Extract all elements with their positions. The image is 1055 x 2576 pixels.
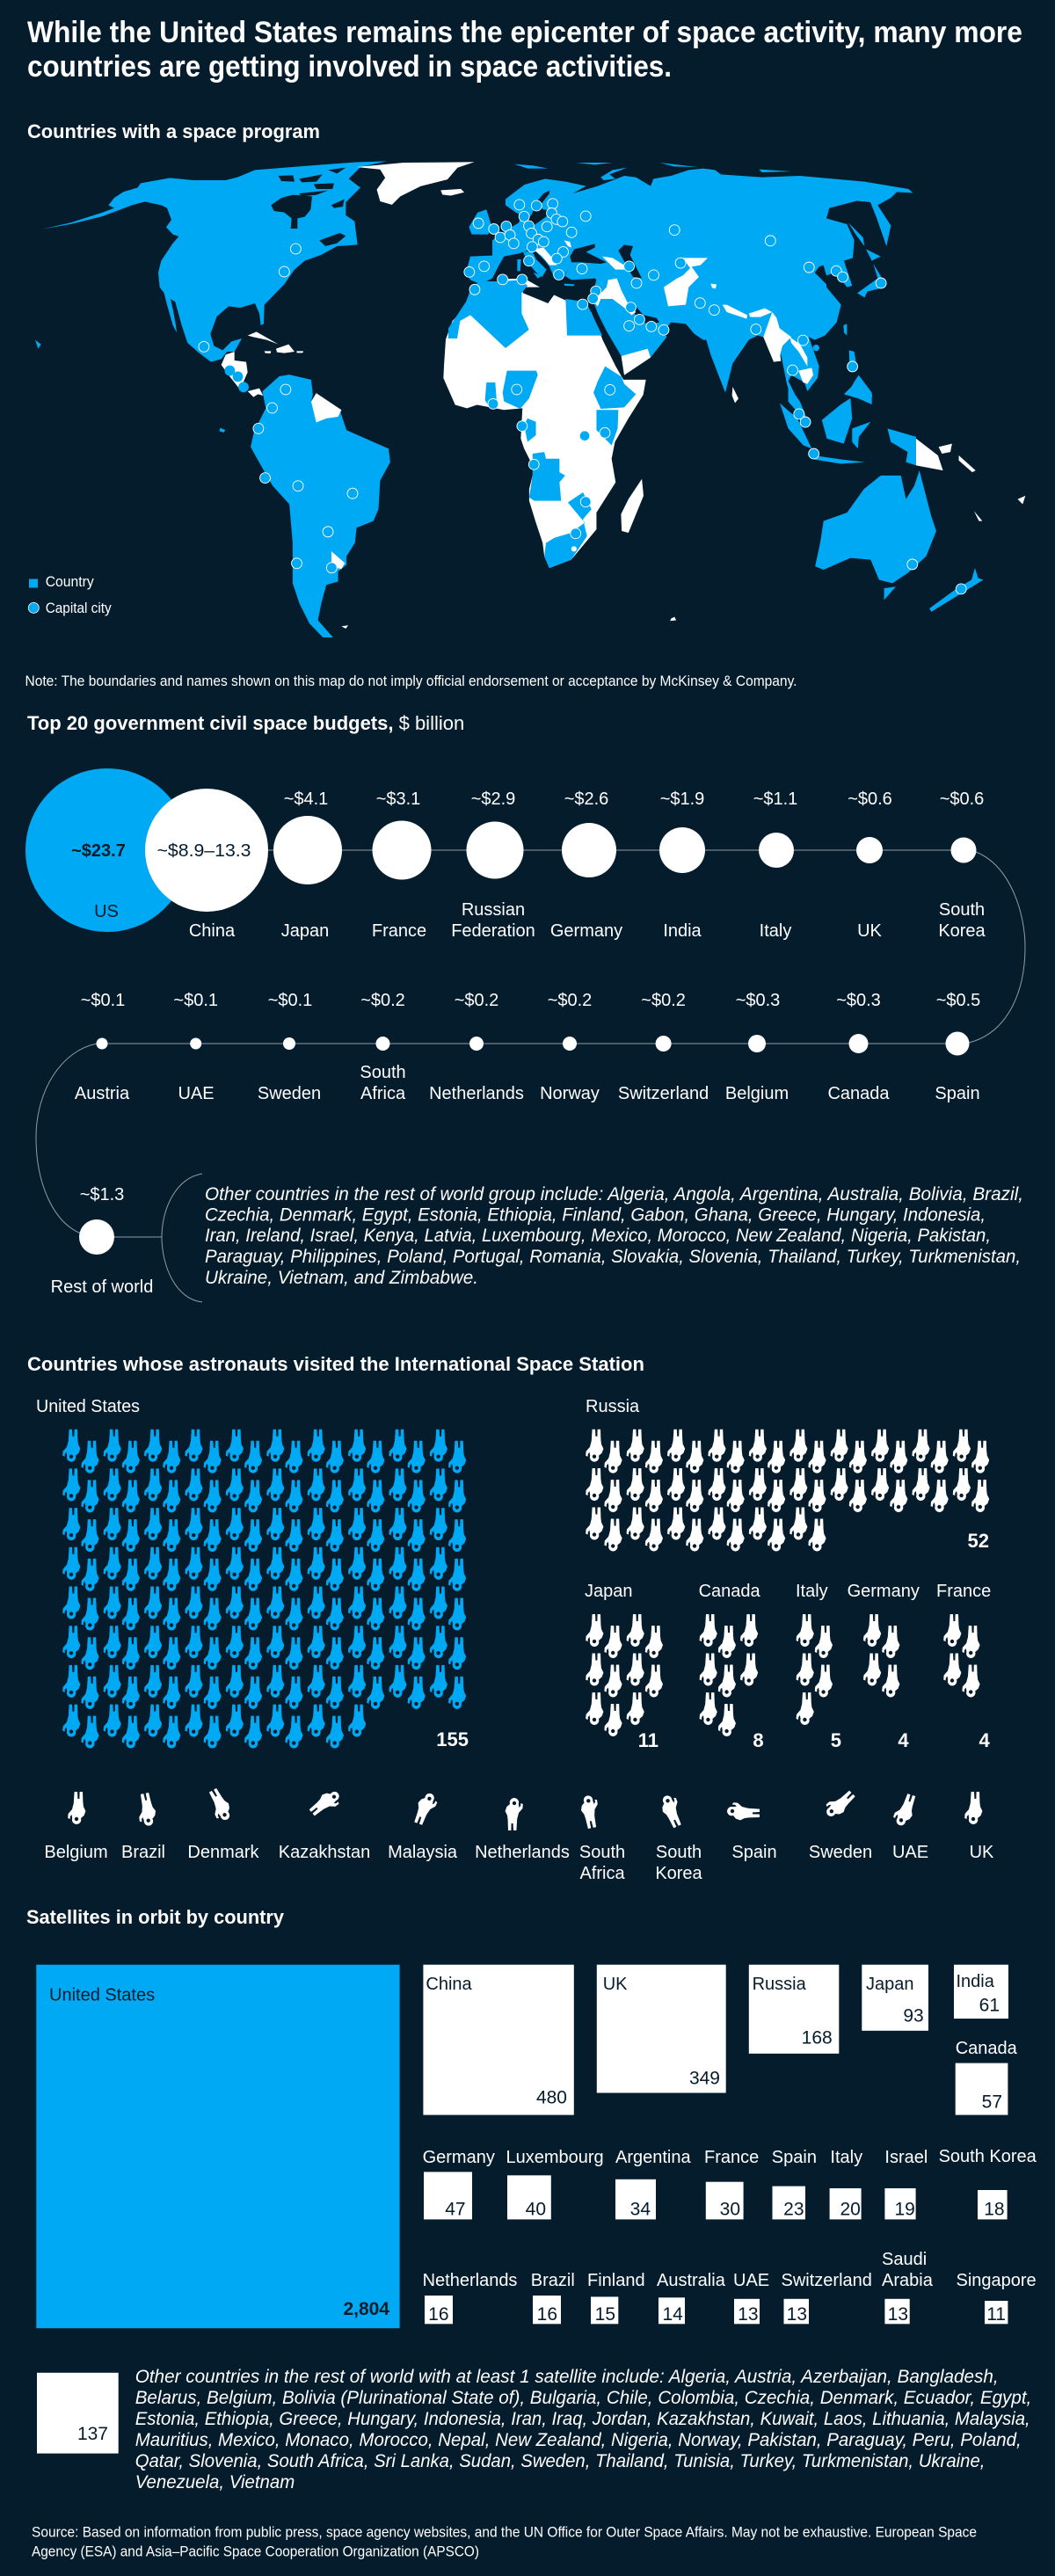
budget: China xyxy=(145,789,268,941)
satellites: Australia: Australia xyxy=(657,2271,726,2290)
satellites: Luxembourg: 40 xyxy=(526,2200,546,2219)
satellites: Germany xyxy=(423,2148,495,2219)
satellites: China xyxy=(423,1965,574,2115)
budget: France: France xyxy=(372,921,426,941)
satellites: Spain: Spain xyxy=(772,2148,817,2167)
budget: South Korea: ~$0.6 xyxy=(940,790,984,809)
budget: UAE: UAE xyxy=(178,1084,215,1103)
satellites: UAE: 13 xyxy=(738,2304,758,2325)
satellites: Netherlands: 16 xyxy=(428,2304,448,2325)
budget: Russian Federation: ~$2.9 xyxy=(471,790,515,809)
budget: France: ~$3.1 xyxy=(376,790,420,809)
satellites: Luxembourg: Luxembourg xyxy=(506,2148,604,2167)
budget: other countries note: Ukraine, Vietnam, and Zimbabwe. xyxy=(205,1268,478,1288)
astronauts: Japan: 11 xyxy=(638,1729,658,1751)
budget: Canada: Canada xyxy=(827,1084,890,1103)
heading: astronauts: Countries whose astronauts visited the International Space Station xyxy=(27,1353,644,1375)
budget: South Korea: Korea xyxy=(938,921,986,941)
heading: budgets: Top 20 government civil space budgets, $ billion xyxy=(27,712,464,734)
budget: Norway xyxy=(540,991,600,1103)
astronauts: Germany: 4 xyxy=(898,1729,909,1751)
budget: Belgium xyxy=(725,991,789,1103)
satellites: China: China xyxy=(426,1975,473,1994)
satellites: Switzerland: 13 xyxy=(787,2304,807,2325)
astronaut: Netherlands xyxy=(475,1798,570,1862)
budget: Canada: ~$0.3 xyxy=(836,991,881,1010)
satellites: Brazil xyxy=(531,2271,575,2325)
budget: Germany: Germany xyxy=(550,921,622,941)
title xyxy=(27,16,1022,84)
satellites: Canada: Canada xyxy=(956,2039,1018,2058)
astronauts: Canada: 8 xyxy=(753,1729,764,1751)
satellites: rest of world: 137 xyxy=(77,2424,108,2444)
astronaut: Denmark xyxy=(187,1786,260,1862)
satellites: Germany: Germany xyxy=(423,2148,495,2167)
satellites: Netherlands xyxy=(423,2271,517,2325)
budget: Sweden xyxy=(258,991,321,1103)
budget: Rest of world: ~$1.3 xyxy=(80,1185,124,1204)
budget: other countries note: Other countries in the rest of world group include: Algeria, Angola, Argentina, Australia, Bolivia, Brazil, xyxy=(205,1184,1023,1204)
astronaut: UK xyxy=(964,1792,994,1862)
astronauts: Canada: Canada xyxy=(699,1582,761,1601)
budget: Italy: Italy xyxy=(760,921,791,941)
astronaut: South Korea: Korea xyxy=(655,1864,703,1883)
astronauts: Russia: Russia xyxy=(586,1397,640,1416)
satellites: Israel xyxy=(884,2148,928,2219)
satellites: Italy: Italy xyxy=(830,2148,862,2167)
capital cities xyxy=(199,199,966,594)
astronauts: France: France xyxy=(936,1582,991,1601)
budget: Italy: ~$1.1 xyxy=(753,790,797,809)
budget: India: ~$1.9 xyxy=(660,790,704,809)
budget: UAE: ~$0.1 xyxy=(173,991,218,1010)
eurasia and north africa xyxy=(448,163,913,411)
astronaut: Kazakhstan xyxy=(279,1786,370,1862)
astronaut: Sweden xyxy=(809,1786,872,1862)
budget: other countries note: Czechia, Denmark, Egypt, Estonia, Ethiopia, Finland, Gabon, Ghana, Greece, Hungary, Indonesia, xyxy=(205,1204,986,1226)
budget: UK xyxy=(848,790,892,941)
satellites: UK: 349 xyxy=(689,2068,720,2089)
budget: South Africa: ~$0.2 xyxy=(360,991,405,1010)
astronauts: Japan: Japan xyxy=(585,1582,633,1601)
satellites: Finland: Finland xyxy=(587,2271,645,2290)
astronaut: UAE: UAE xyxy=(892,1843,928,1862)
satellites: India: 61 xyxy=(979,1996,1000,2015)
astronaut: South Korea: South xyxy=(656,1843,702,1862)
satellites: Saudi Arabia: Saudi xyxy=(882,2250,927,2269)
budget: Belgium: Belgium xyxy=(725,1084,789,1103)
satellites: Singapore: Singapore xyxy=(957,2271,1037,2290)
budget: Canada xyxy=(827,991,890,1103)
budget: US: ~$23.7 xyxy=(71,841,126,861)
astronauts: United States: United States xyxy=(36,1397,140,1416)
astronaut: Spain: Spain xyxy=(731,1843,777,1862)
budget: India xyxy=(659,790,705,941)
budget: India: India xyxy=(663,921,702,941)
astronaut: Malaysia xyxy=(388,1791,458,1862)
budget: Norway: ~$0.2 xyxy=(548,991,592,1010)
budget: Russian Federation xyxy=(451,790,535,941)
satellites: Italy: 20 xyxy=(840,2200,861,2219)
astronauts: Italy: Italy xyxy=(796,1582,828,1601)
budget: South Africa: Africa xyxy=(360,1084,406,1103)
satellites: France xyxy=(704,2148,759,2219)
satellites: Russia: 168 xyxy=(802,2027,833,2048)
source: Source: Based on information from public press, space agency websites, and the UN Office for Outer Space Affairs. May not be exhaustive. European Space xyxy=(32,2523,977,2541)
astronauts: Germany: Germany xyxy=(848,1582,920,1601)
budget: Germany: ~$2.6 xyxy=(564,790,608,809)
budget: Sweden: ~$0.1 xyxy=(268,991,312,1010)
satellites: other countries note: Estonia, Ethiopia, Greece, Hungary, Indonesia, Iran, Iraq, Jordan, Kazakhstan, Kuwait, Laos, Lithuania, Malaysia, xyxy=(135,2409,1030,2429)
map legend xyxy=(28,573,112,616)
budget: US xyxy=(25,768,189,932)
budget: France xyxy=(372,790,431,941)
budget: Rest of world xyxy=(51,1185,153,1297)
satellites: India xyxy=(954,1965,1008,2019)
astronaut: Belgium xyxy=(44,1792,108,1862)
satellites: Israel: Israel xyxy=(884,2148,928,2167)
astronauts: France xyxy=(936,1582,991,1751)
satellites: Luxembourg xyxy=(506,2148,604,2219)
astronaut: South Africa xyxy=(578,1794,625,1883)
satellites: Finland xyxy=(587,2271,645,2325)
budget: Russian Federation: Russian xyxy=(462,900,525,920)
satellites: UK xyxy=(597,1965,726,2092)
budget: South Korea xyxy=(938,790,986,941)
budget: other countries note: Iran, Ireland, Israel, Kenya, Latvia, Luxembourg, Mexico, Morocco, New Zealand, Nigeria, Pakistan, xyxy=(205,1226,991,1246)
budget: other countries note: Paraguay, Philippines, Poland, Portugal, Romania, Slovakia, Slovenia, Thailand, Turkey, Turkmenistan, xyxy=(205,1247,1021,1267)
budget: other countries note xyxy=(205,1184,1023,1288)
satellites: UAE: UAE xyxy=(733,2271,769,2290)
satellites: Canada xyxy=(956,2039,1018,2115)
astronauts: Japan xyxy=(585,1582,663,1751)
satellites: other countries note: Belarus, Belgium, Bolivia (Plurinational State of), Bulgaria, Chile, Colombia, Czechia, Denmark, Ecuador, Egypt, xyxy=(135,2388,1031,2408)
budget: Russian Federation: Federation xyxy=(451,921,535,941)
astronauts: Russia: 52 xyxy=(968,1530,989,1552)
budget: Austria xyxy=(75,991,130,1103)
budget: Japan: ~$4.1 xyxy=(284,790,328,809)
satellites: Japan: 93 xyxy=(903,2006,924,2026)
budget: Spain: Spain xyxy=(935,1084,980,1103)
satellites: UAE xyxy=(733,2271,769,2325)
satellites: Netherlands: Netherlands xyxy=(423,2271,517,2290)
budget: South Korea: South xyxy=(939,900,985,920)
budget: UAE xyxy=(173,991,218,1103)
satellites: United States: 2,804 xyxy=(343,2299,389,2319)
satellites: other countries note: Mauritius, Mexico, Monaco, Morocco, Nepal, New Zealand, Nigeria, Norway, Pakistan, Paraguay, Peru, Poland, xyxy=(135,2430,1022,2450)
budget: Switzerland: ~$0.2 xyxy=(641,991,686,1010)
astronauts: France: 4 xyxy=(979,1729,990,1751)
astronaut: Netherlands: Netherlands xyxy=(475,1843,570,1862)
satellites: Switzerland xyxy=(781,2271,872,2325)
budget: South Africa: South xyxy=(360,1063,406,1082)
astronaut: South Korea xyxy=(655,1793,703,1883)
satellites: Argentina: 34 xyxy=(630,2200,651,2219)
budget: China: ~$8.9–13.3 xyxy=(156,841,251,861)
satellites: South Korea: South Korea xyxy=(939,2147,1037,2166)
astronauts: Germany xyxy=(848,1582,920,1751)
world map xyxy=(35,161,1025,637)
astronaut: UAE xyxy=(891,1792,928,1862)
astronaut: Belgium: Belgium xyxy=(44,1843,108,1862)
astronaut: Denmark: Denmark xyxy=(187,1843,260,1862)
astronauts: Canada xyxy=(699,1582,764,1751)
satellites: Russia: Russia xyxy=(753,1975,807,1994)
astronaut: Malaysia: Malaysia xyxy=(388,1843,458,1862)
satellites: Saudi Arabia xyxy=(882,2250,934,2325)
budget: Belgium: ~$0.3 xyxy=(736,991,780,1010)
satellites: UK: UK xyxy=(603,1975,628,1994)
budget: Spain xyxy=(935,991,980,1103)
satellites: Saudi Arabia: 13 xyxy=(888,2304,908,2325)
satellites: Japan: Japan xyxy=(866,1975,914,1994)
astronauts: United States: 155 xyxy=(436,1728,469,1750)
source xyxy=(32,2523,977,2560)
satellites: other countries note: Qatar, Slovenia, South Africa, Sri Lanka, Sudan, Sweden, Thailand, Tunisia, Turkey, Turkmenistan, Ukraine, xyxy=(135,2451,985,2471)
satellites: other countries note: Other countries in the rest of world with at least 1 satellite include: Algeria, Austria, Azerbaijan, Bangladesh, xyxy=(135,2367,999,2387)
budget: UK: UK xyxy=(857,921,883,941)
budget: Austria: Austria xyxy=(75,1084,130,1103)
astronauts: Italy: 5 xyxy=(831,1729,841,1751)
satellites: Spain: 23 xyxy=(783,2200,804,2219)
budget: Spain: ~$0.5 xyxy=(936,991,980,1010)
satellites: rest of world xyxy=(37,2373,119,2454)
satellites: Finland: 15 xyxy=(595,2304,615,2325)
budget: China: China xyxy=(189,921,236,941)
astronaut: Brazil xyxy=(121,1792,165,1862)
satellites: South Korea xyxy=(939,2147,1037,2219)
budget: UK: ~$0.6 xyxy=(848,790,892,809)
budget: Netherlands xyxy=(429,991,524,1103)
budget: US: US xyxy=(94,902,119,921)
budget: Japan: Japan xyxy=(281,921,329,941)
budget: Italy xyxy=(753,790,797,941)
satellites: Singapore xyxy=(957,2271,1037,2325)
budget: Germany xyxy=(550,790,622,941)
satellites: United States xyxy=(36,1965,400,2328)
north america xyxy=(35,161,387,397)
astronaut: South Africa: South xyxy=(579,1843,625,1862)
budget connector lines xyxy=(36,850,1025,1302)
satellites: Brazil: Brazil xyxy=(531,2271,575,2290)
satellites: France: France xyxy=(704,2148,759,2167)
astronauts: United States xyxy=(36,1397,469,1750)
budget: Japan xyxy=(273,790,342,941)
budget: Sweden: Sweden xyxy=(258,1084,321,1103)
budget: Austria: ~$0.1 xyxy=(81,991,125,1010)
satellites: other countries note: Venezuela, Vietnam xyxy=(135,2472,295,2492)
astronaut: UK: UK xyxy=(970,1843,994,1862)
astronaut: Kazakhstan: Kazakhstan xyxy=(279,1843,370,1862)
budget: Netherlands: ~$0.2 xyxy=(455,991,498,1010)
budget: South Africa xyxy=(360,991,406,1103)
budget: Netherlands: Netherlands xyxy=(429,1084,524,1103)
satellites: United States: United States xyxy=(49,1985,155,2005)
satellites: Australia xyxy=(657,2271,726,2325)
astronaut: Spain xyxy=(727,1802,777,1862)
satellites: France: 30 xyxy=(720,2200,740,2219)
astronauts: Italy xyxy=(796,1582,841,1751)
satellites: India: India xyxy=(957,1972,995,1991)
satellites: Singapore: 11 xyxy=(986,2304,1006,2325)
budget: Switzerland: Switzerland xyxy=(618,1084,709,1103)
source: Agency (ESA) and Asia–Pacific Space Cooperation Organization (APSCO) xyxy=(32,2543,479,2560)
astronaut: South Africa: Africa xyxy=(579,1864,625,1883)
astronaut: Sweden: Sweden xyxy=(809,1843,872,1862)
satellites: Argentina xyxy=(615,2148,691,2219)
satellites: Switzerland: Switzerland xyxy=(781,2271,872,2290)
budget: Norway: Norway xyxy=(540,1084,600,1103)
satellites: Brazil: 16 xyxy=(537,2304,557,2325)
satellites: Italy xyxy=(830,2148,862,2219)
budget: Switzerland xyxy=(618,991,709,1103)
satellites: Russia xyxy=(749,1965,839,2054)
title: countries are getting involved in space activities. xyxy=(27,50,672,84)
heading: countries with a space program: Countries with a space program xyxy=(27,120,320,142)
map legend: Capital city xyxy=(46,600,112,616)
satellites: Saudi Arabia: Arabia xyxy=(882,2271,934,2290)
map legend: Country xyxy=(46,573,94,590)
satellites: Japan xyxy=(862,1965,928,2031)
budget: Rest of world: Rest of world xyxy=(51,1277,153,1297)
astronauts: Russia xyxy=(586,1397,989,1552)
south america, greenland, africa base, oceania xyxy=(219,162,1025,637)
satellites: Germany: 47 xyxy=(445,2200,466,2219)
satellites: China: 480 xyxy=(536,2087,567,2108)
satellites: Israel: 19 xyxy=(894,2200,915,2219)
satellites: Spain xyxy=(772,2148,817,2219)
satellites: Argentina: Argentina xyxy=(615,2148,691,2167)
satellites: Canada: 57 xyxy=(982,2092,1002,2112)
astronaut: Brazil: Brazil xyxy=(121,1843,165,1862)
satellites: other countries note xyxy=(135,2367,1031,2492)
satellites: Australia: 14 xyxy=(662,2304,683,2325)
heading: satellites: Satellites in orbit by country xyxy=(26,1906,285,1928)
map note: Note: The boundaries and names shown on this map do not imply official endorsement or acceptance by McKinsey & Company. xyxy=(25,673,797,689)
satellites: South Korea: 18 xyxy=(984,2200,1005,2219)
